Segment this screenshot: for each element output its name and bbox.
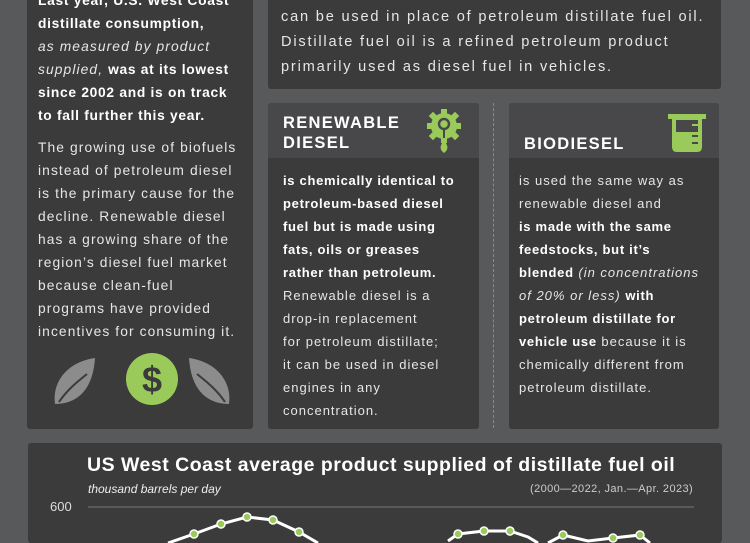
panel: biodiesel [509,103,719,429]
text block: distillate definition: primarily used as diesel fuel in vehicles. [281,59,613,75]
text block: renewable description: is chemically identical to [283,173,454,188]
text block: key finding: to fall further this year. [38,108,205,123]
text block: renewable description: drop-in replacement [283,311,418,326]
text block: renewable description: fuel but is made using [283,219,436,234]
text block: renewable description: it can be used in diesel [283,357,439,372]
icons: leaves and dollar [54,353,230,405]
chart subtitle: thousand barrels per day [88,482,221,496]
text block: renewable description: for petroleum distillate; [283,334,439,349]
icon: left leaf [55,358,95,404]
icon: beaker [668,114,706,152]
header: renewable diesel: DIESEL [283,134,350,152]
text block: explanation: decline. Renewable diesel [38,209,226,224]
text block: key finding: distillate consumption, [38,16,204,31]
text block: key finding: as measured by product [38,39,210,54]
text block: explanation: region’s diesel fuel market [38,255,228,270]
text block: biodiesel description: vehicle use because it is [519,334,687,349]
text block: biodiesel description: renewable diesel and [519,196,662,211]
panel: definition top [268,0,721,89]
text block: explanation: instead of petroleum diesel [38,163,233,178]
text block: renewable description: engines in any [283,380,381,395]
line chart: 600 [50,499,72,514]
text block: distillate definition [281,9,704,75]
text block: biodiesel description: chemically different from [519,357,685,372]
panel: renewable diesel [268,103,479,429]
text block: key finding [38,0,229,123]
text block: renewable description: fats, oils or greases [283,242,420,257]
text block: biodiesel description: is made with the same [519,219,672,234]
text block: renewable description: Renewable diesel is a [283,288,430,303]
text block: biodiesel description: of 20% or less) with [519,288,654,303]
text block: renewable description: petroleum-based diesel [283,196,444,211]
chart date range: (2000—2022, Jan.—Apr. 2023) [530,483,693,495]
text block: explanation [38,140,236,339]
text block: explanation: programs have provided [38,301,211,316]
text block: key finding: supplied, was at its lowest [38,62,229,77]
text block: explanation: incentives for consuming it. [38,324,235,339]
icon: right leaf [189,358,229,404]
header: renewable diesel [268,103,479,158]
panel: left intro [27,0,253,429]
text block: renewable description: rather than petroleum. [283,265,436,280]
text block: distillate definition: Distillate fuel oil is a refined petroleum product [281,34,670,50]
icon: dollar coin: $ [142,359,162,400]
header: renewable diesel: RENEWABLE [283,114,400,132]
text block: renewable description: concentration. [283,403,379,418]
line chart [50,499,694,543]
header: biodiesel: BIODIESEL [524,135,625,153]
icon: gear with drop [427,109,461,153]
text block: explanation: because clean-fuel [38,278,174,293]
text block: biodiesel description: blended (in concentrations [519,265,699,280]
text block: key finding: since 2002 and is on track [38,85,227,100]
text block: biodiesel description: petroleum distillate for [519,311,676,326]
text block: distillate definition: can be used in place of petroleum distillate fuel oil. [281,9,704,25]
divider dashed [493,103,494,428]
text block: biodiesel description: is used the same way as [519,173,684,188]
panel: chart [28,443,722,543]
text block: biodiesel description: petroleum distillate. [519,380,652,395]
text block: renewable description [283,173,454,418]
text block: biodiesel description [519,173,699,395]
text block: explanation: has a growing share of the [38,232,229,247]
text block: explanation: The growing use of biofuels [38,140,236,155]
chart title: US West Coast average product supplied of distillate fuel oil [87,454,675,476]
icon: dollar coin [126,353,178,405]
text block: biodiesel description: feedstocks, but it’s [519,242,650,257]
header: biodiesel [509,103,719,158]
text block: explanation: is the primary cause for the [38,186,235,201]
